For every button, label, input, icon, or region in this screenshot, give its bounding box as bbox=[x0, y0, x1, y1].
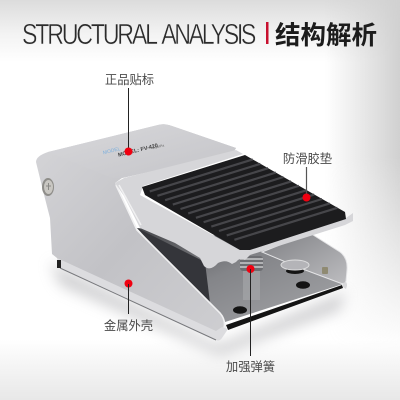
lip end bbox=[57, 260, 61, 268]
base plate bbox=[137, 228, 343, 323]
housing top face bbox=[48, 124, 236, 178]
callout: reinforced spring bbox=[226, 265, 275, 374]
callout: anti-slip pad bbox=[283, 151, 332, 202]
foot pedal valve product bbox=[36, 124, 353, 355]
product label bbox=[102, 136, 165, 162]
spring bbox=[240, 256, 263, 271]
bracket washer bbox=[281, 260, 309, 270]
callout: metal housing bbox=[104, 280, 153, 333]
pedal side interior bbox=[137, 228, 210, 303]
front plate edge bbox=[226, 285, 343, 330]
metal housing side bbox=[36, 124, 236, 340]
rear bracket bbox=[262, 233, 347, 284]
pedal edge highlight bbox=[119, 185, 141, 225]
screw bbox=[42, 178, 54, 196]
metal pedal plate bbox=[115, 150, 353, 268]
title: red divider bbox=[266, 22, 268, 44]
callout: reinforced spring: 加强弹簧 bbox=[226, 359, 275, 374]
label: blue logo: MODEL bbox=[102, 146, 121, 156]
label: pressure: 0.8MPa bbox=[152, 143, 165, 150]
plate holes bbox=[233, 268, 310, 314]
title: english heading bbox=[22, 17, 256, 51]
title: chinese heading: 结构解析 bbox=[275, 22, 377, 50]
spring rod bbox=[243, 268, 260, 300]
bottom lip bbox=[57, 258, 228, 341]
title: english heading: ANALYSIS bbox=[161, 17, 256, 51]
rubber anti-slip pad bbox=[142, 155, 346, 250]
label: model: MODEL: FV-420 bbox=[117, 143, 159, 159]
title: english heading: STRUCTURAL bbox=[22, 17, 158, 51]
bolt bbox=[322, 267, 328, 274]
rubber ribs bbox=[150, 159, 337, 240]
housing slanted edge bbox=[116, 185, 224, 328]
callout: genuine label bbox=[105, 73, 154, 156]
callout: anti-slip pad: 防滑胶垫 bbox=[283, 151, 332, 166]
callout: metal housing: 金属外壳 bbox=[104, 318, 153, 333]
ground shadow bbox=[50, 262, 345, 355]
callout: genuine label: 正品贴标 bbox=[105, 73, 154, 87]
title bbox=[22, 17, 377, 51]
